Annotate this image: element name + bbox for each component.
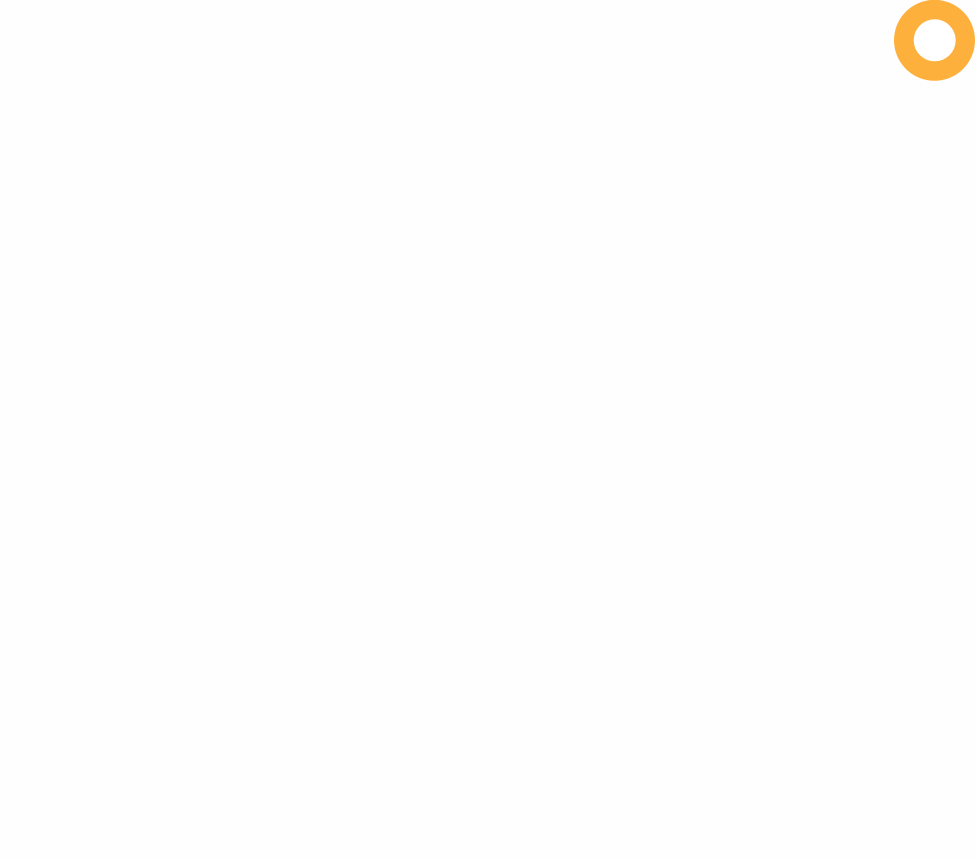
icon: orange ring <box>894 0 975 81</box>
